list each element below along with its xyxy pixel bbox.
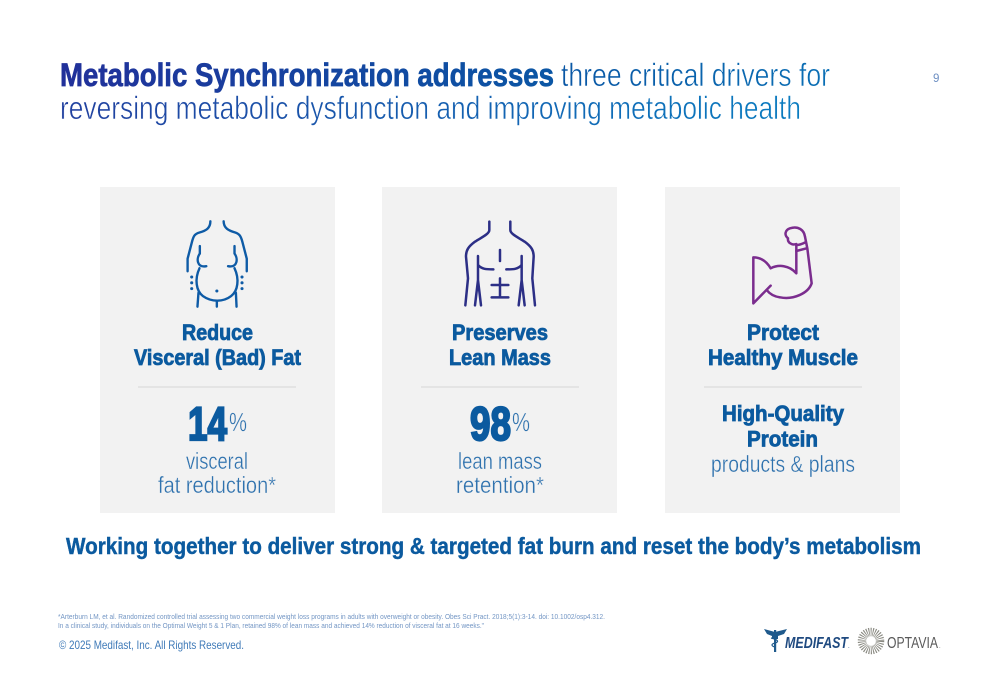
logo: Optavia: . — [939, 644, 941, 650]
heading: Protect — [747, 320, 820, 345]
footnote: In a clinical study, individuals on the Optimal Weight 5 & 1 Plan, retained 98% of lean mass and achieved 14% reduction of visceral fat at 16 weeks." — [58, 621, 484, 630]
stat: 14 percent: % — [229, 407, 247, 437]
heading: Lean Mass — [449, 345, 551, 370]
description: visceral — [186, 448, 248, 474]
heading — [449, 320, 551, 370]
icon: torso with belly fat — [188, 221, 247, 307]
stat: high-quality protein: High-Quality — [722, 401, 845, 426]
title: Metabolic Synchronization addresses — [60, 57, 554, 93]
icon: sunburst — [862, 632, 880, 650]
logo: Medifast: MEDIFAST — [785, 635, 849, 652]
heading — [708, 320, 858, 370]
title — [60, 57, 830, 126]
heading: Visceral (Bad) Fat — [134, 345, 302, 370]
logo: Medifast: . — [848, 644, 850, 650]
description: products & plans — [711, 451, 855, 477]
icon: flexed arm — [753, 228, 812, 303]
footnote — [58, 612, 605, 630]
page number: 9 — [933, 73, 939, 85]
title: three critical drivers for — [561, 57, 830, 93]
heading: Healthy Muscle — [708, 345, 858, 370]
panel: reduce visceral fat — [100, 187, 335, 513]
title: reversing metabolic dysfunction and improving metabolic health — [60, 90, 801, 126]
description: lean mass — [458, 448, 542, 474]
icon: caduceus — [764, 629, 787, 652]
heading: Reduce — [182, 320, 253, 345]
logo: Optavia — [862, 632, 941, 652]
logo: Optavia: OPTAVIA — [887, 635, 939, 652]
footnote: *Arterburn LM, et al. Randomized controlled trial assessing two commercial weight loss programs in adults with overweight or obesity. Obes Sci Pract. 2018;5(1):3-14. doi: 10.1002/osp4.312. — [58, 612, 605, 621]
description: fat reduction* — [158, 472, 276, 498]
stat: 14 percent: 14 — [188, 397, 227, 450]
description: retention* — [456, 472, 544, 498]
logo: Medifast — [764, 629, 850, 652]
description — [456, 448, 544, 498]
heading: Preserves — [452, 320, 548, 345]
stat: 98 percent: 98 — [470, 397, 511, 450]
icon: lean torso — [465, 222, 535, 305]
tagline: Working together to deliver strong & targeted fat burn and reset the body’s metabolism — [66, 533, 921, 559]
panel: preserves lean mass — [382, 187, 617, 513]
copyright: © 2025 Medifast, Inc. All Rights Reserved. — [59, 638, 244, 652]
description — [158, 448, 276, 498]
stat: 98 percent: % — [512, 407, 530, 437]
stat: high-quality protein — [722, 401, 845, 452]
panel: protect healthy muscle — [665, 187, 900, 513]
stat: high-quality protein: Protein — [747, 426, 818, 452]
heading — [134, 320, 302, 370]
